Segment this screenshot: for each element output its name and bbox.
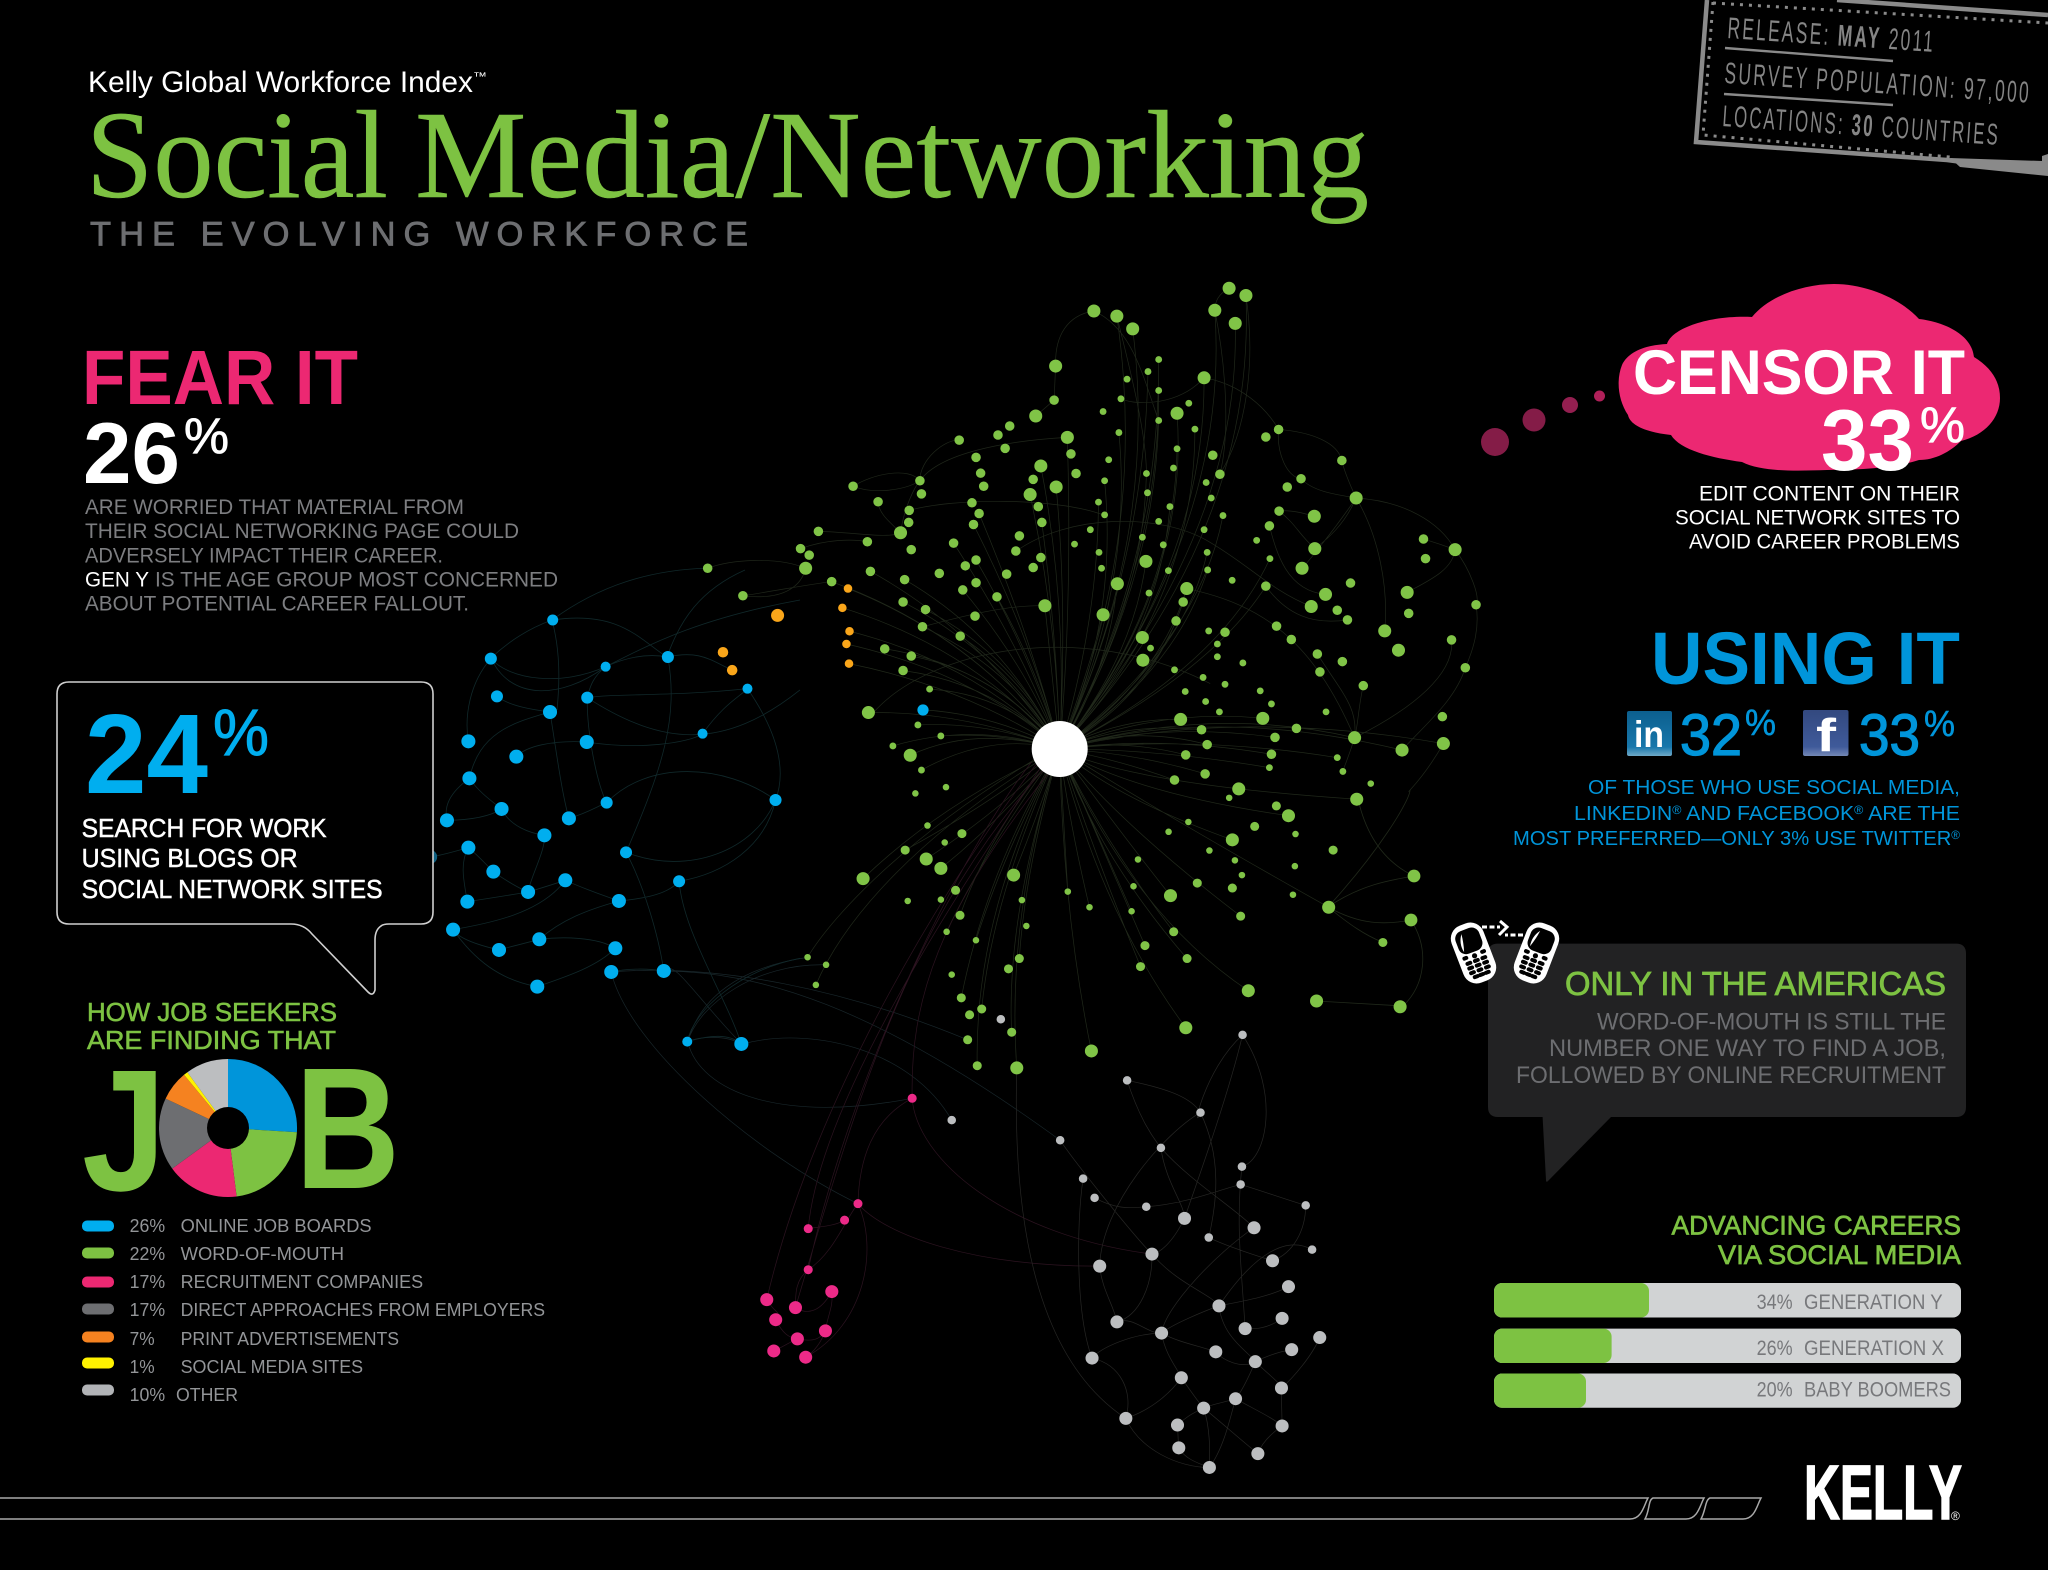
logo: Kelly: ® [1951, 1509, 1960, 1523]
cloud [1619, 284, 2000, 471]
description: NUMBER ONE WAY TO FIND A JOB, [1549, 1035, 1946, 1062]
icon: facebook [1803, 709, 1848, 761]
JOB wordmark with pie chart: B [295, 1031, 400, 1225]
stat: 26 percent: 26 [83, 406, 180, 502]
description: IS THE AGE GROUP MOST CONCERNED [155, 568, 558, 592]
green nodes [708, 288, 1476, 780]
stat: linkedin 32 percent: 32 [1680, 703, 1742, 768]
bar: baby boomers [1494, 1374, 1961, 1408]
main title: Social [86, 87, 388, 225]
heading: ARE FINDING THAT [87, 1025, 336, 1055]
heading [87, 997, 337, 1055]
thought dots [1481, 390, 1605, 456]
stamp: release info: RELEASE: MAY 2011 [1727, 12, 1936, 59]
description: AND FACEBOOK [1681, 802, 1855, 825]
blue nodes [422, 657, 776, 1044]
stat: 26 percent: % [184, 408, 229, 464]
panel: fear it [82, 335, 558, 616]
heading: ONLY IN THE AMERICAS [1565, 965, 1946, 1002]
description: WORD-OF-MOUTH IS STILL THE [1597, 1008, 1946, 1036]
heading: using it: USING IT [1651, 617, 1960, 700]
legend [82, 1215, 545, 1405]
green nodes: far right [1405, 870, 1420, 926]
pie chart [159, 1059, 297, 1197]
description: OF THOSE WHO USE SOCIAL MEDIA, [1588, 776, 1960, 799]
description: ADVERSELY IMPACT THEIR CAREER. [85, 544, 443, 568]
connection lines: lower fan, gray and pink clusters [611, 749, 1357, 1467]
callout: 24 percent [57, 682, 433, 994]
legend: 10% [130, 1384, 165, 1405]
pink nodes [767, 1098, 912, 1357]
central white hub node [1032, 721, 1088, 777]
legend: 17% [130, 1271, 165, 1292]
description: SOCIAL NETWORK SITES TO [1675, 506, 1960, 530]
main title: Media/Networking [415, 87, 1369, 225]
description [1516, 1008, 1946, 1089]
legend: SOCIAL MEDIA SITES [181, 1356, 363, 1377]
heading [1672, 1211, 1961, 1270]
legend: WORD-OF-MOUTH [181, 1243, 344, 1264]
legend: 17% [130, 1299, 165, 1320]
stat: facebook 33 percent: % [1924, 703, 1955, 744]
description: FOLLOWED BY ONLINE RECRUITMENT [1516, 1062, 1946, 1089]
bar: baby boomers: 20% [1757, 1379, 1793, 1402]
stat: facebook 33 percent [1859, 703, 1955, 768]
legend: 1% [130, 1356, 155, 1377]
description [82, 813, 383, 904]
network graph [422, 288, 1477, 1467]
description [1675, 481, 1960, 554]
header block [86, 66, 1369, 253]
stat: 24 percent: 24 [85, 691, 208, 817]
connection lines: blue cluster [430, 656, 800, 1044]
orange nodes [723, 589, 850, 670]
stamp: release info [1696, 0, 2048, 176]
bar: baby boomers: BABY BOOMERS [1804, 1379, 1951, 1402]
stat: 33 percent: 33 [1821, 393, 1914, 489]
subtitle: THE EVOLVING WORKFORCE [90, 215, 748, 253]
description: EDIT CONTENT ON THEIR [1699, 481, 1960, 505]
stat: linkedin 32 percent [1680, 702, 1776, 768]
legend: ONLINE JOB BOARDS [181, 1215, 372, 1236]
icon: two phones with arrows [1447, 918, 1563, 988]
description [85, 495, 558, 616]
logo: Kelly [1804, 1450, 1962, 1536]
description: USING BLOGS OR [82, 843, 298, 873]
gray nodes [952, 1019, 1320, 1467]
legend: 7% [130, 1328, 155, 1349]
heading: VIA SOCIAL MEDIA [1718, 1240, 1961, 1270]
JOB wordmark with pie chart [82, 1031, 400, 1227]
bar: generation x: GENERATION X [1804, 1337, 1944, 1360]
bar: generation y: GENERATION Y [1804, 1291, 1943, 1314]
description: ® [1854, 803, 1864, 817]
green nodes: lower group [808, 784, 1400, 1068]
logo: Kelly: KELLY [1804, 1450, 1962, 1536]
kicker: Kelly Global Workforce Index: ™ [473, 71, 487, 83]
bar: generation x [1494, 1329, 1961, 1363]
stat: 33 percent: % [1920, 397, 1965, 453]
stat: 26 percent [83, 406, 229, 502]
icon: facebook: f [1816, 709, 1837, 761]
description: SEARCH FOR WORK [82, 813, 327, 843]
stat: facebook 33 percent: 33 [1859, 703, 1920, 768]
description [1513, 776, 1960, 850]
description: ® [1672, 803, 1682, 817]
panel: using it [1513, 617, 1960, 850]
stat: linkedin 32 percent: % [1745, 702, 1776, 743]
description: LINKEDIN [1574, 802, 1669, 825]
heading: HOW JOB SEEKERS [87, 997, 337, 1027]
description: ® [1951, 828, 1960, 842]
bar: generation y [1494, 1283, 1961, 1318]
stat: 24 percent: % [213, 695, 269, 769]
legend: DIRECT APPROACHES FROM EMPLOYERS [181, 1299, 545, 1320]
legend: 22% [130, 1243, 165, 1264]
description: AVOID CAREER PROBLEMS [1689, 530, 1960, 554]
description: THEIR SOCIAL NETWORKING PAGE COULD [85, 519, 519, 543]
panel: advancing careers [1494, 1211, 1961, 1408]
bar: generation x: 26% [1757, 1337, 1793, 1360]
description: GEN Y [85, 568, 149, 592]
speech bubble outline [57, 682, 433, 994]
heading: censor it: CENSOR IT [1633, 338, 1965, 408]
connection lines: far right green [1316, 790, 1423, 1006]
description: ABOUT POTENTIAL CAREER FALLOUT. [85, 592, 469, 616]
description: ARE THE [1863, 802, 1960, 825]
description: ARE WORRIED THAT MATERIAL FROM [85, 495, 464, 519]
JOB wordmark with pie chart: J [82, 1033, 166, 1227]
blue nodes: upper and central [547, 614, 929, 716]
description: MOST PREFERRED—ONLY 3% USE TWITTER [1513, 827, 1958, 850]
icon: linkedin [1627, 711, 1672, 756]
speech bubble [1488, 944, 1966, 1182]
description: SOCIAL NETWORK SITES [82, 874, 383, 904]
legend: PRINT ADVERTISEMENTS [181, 1328, 399, 1349]
footer rule with slanted segments [0, 1498, 1761, 1519]
legend: 26% [130, 1215, 165, 1236]
heading: fear it: FEAR IT [82, 335, 358, 421]
panel: only in the americas [1447, 918, 1966, 1182]
icon: linkedin: in [1634, 714, 1664, 755]
kicker: Kelly Global Workforce Index: Kelly Global Workforce Index [88, 66, 473, 99]
panel: censor it [1481, 284, 2000, 554]
heading: ADVANCING CAREERS [1672, 1211, 1961, 1241]
connection lines: top of blue cluster [491, 568, 800, 710]
legend: RECRUITMENT COMPANIES [181, 1271, 423, 1292]
panel: how job seekers find jobs [82, 997, 545, 1405]
stat: 33 percent [1821, 393, 1965, 489]
connection lines: green fan [708, 288, 1477, 792]
legend: OTHER [176, 1384, 238, 1405]
bar: generation y: 34% [1757, 1291, 1793, 1314]
stat: 24 percent [85, 691, 269, 817]
